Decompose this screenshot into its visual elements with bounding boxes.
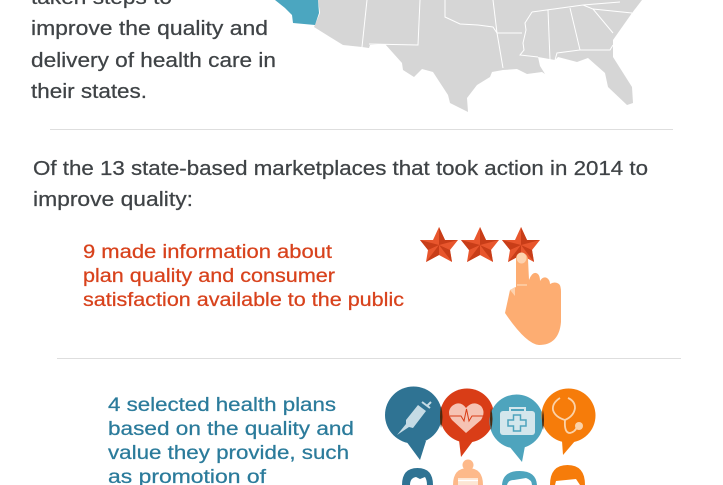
avatar: teal-haired person bbox=[502, 471, 537, 485]
text block: plan quality information: 9 made information about bbox=[83, 242, 333, 263]
text block: marketplaces statement: improve quality: bbox=[33, 189, 193, 211]
text block: marketplaces statement bbox=[33, 158, 648, 211]
speech bubble: heart bbox=[440, 388, 494, 457]
text block: plan quality information: plan quality and consumer bbox=[83, 266, 336, 287]
text block: selected health plans: based on the quality and bbox=[108, 419, 354, 440]
text block: marketplaces statement: Of the 13 state-based marketplaces that took action in 2014 to bbox=[33, 158, 648, 180]
speech bubble: syringe bbox=[385, 386, 442, 460]
text block: plan quality information: satisfaction available to the public bbox=[83, 290, 404, 311]
people avatars bbox=[402, 460, 585, 485]
text block: intro about states bbox=[31, 0, 276, 103]
text block: selected health plans bbox=[108, 395, 354, 485]
avatar: orange-haired person bbox=[550, 465, 585, 485]
icon: three stars bbox=[420, 227, 540, 262]
map: southern United States bbox=[275, 0, 642, 112]
text block: selected health plans: 4 selected health plans bbox=[108, 395, 336, 416]
map: highlighted California bbox=[275, 0, 319, 25]
text block: plan quality information bbox=[83, 242, 404, 311]
speech bubble: medical kit bbox=[490, 394, 544, 462]
text block: intro about states: their states. bbox=[31, 81, 147, 103]
overlap shading between bubbles bbox=[440, 406, 544, 430]
text block: intro about states: delivery of health care in bbox=[31, 50, 276, 72]
avatar: blue-haired person bbox=[402, 468, 433, 485]
icon: pointing hand bbox=[505, 252, 561, 345]
text block: intro about states: improve the quality and bbox=[31, 18, 268, 40]
speech bubble: stethoscope bbox=[542, 388, 596, 455]
text block: selected health plans: value they provide, such bbox=[108, 443, 349, 464]
avatar: person with bun and glasses bbox=[453, 460, 483, 485]
